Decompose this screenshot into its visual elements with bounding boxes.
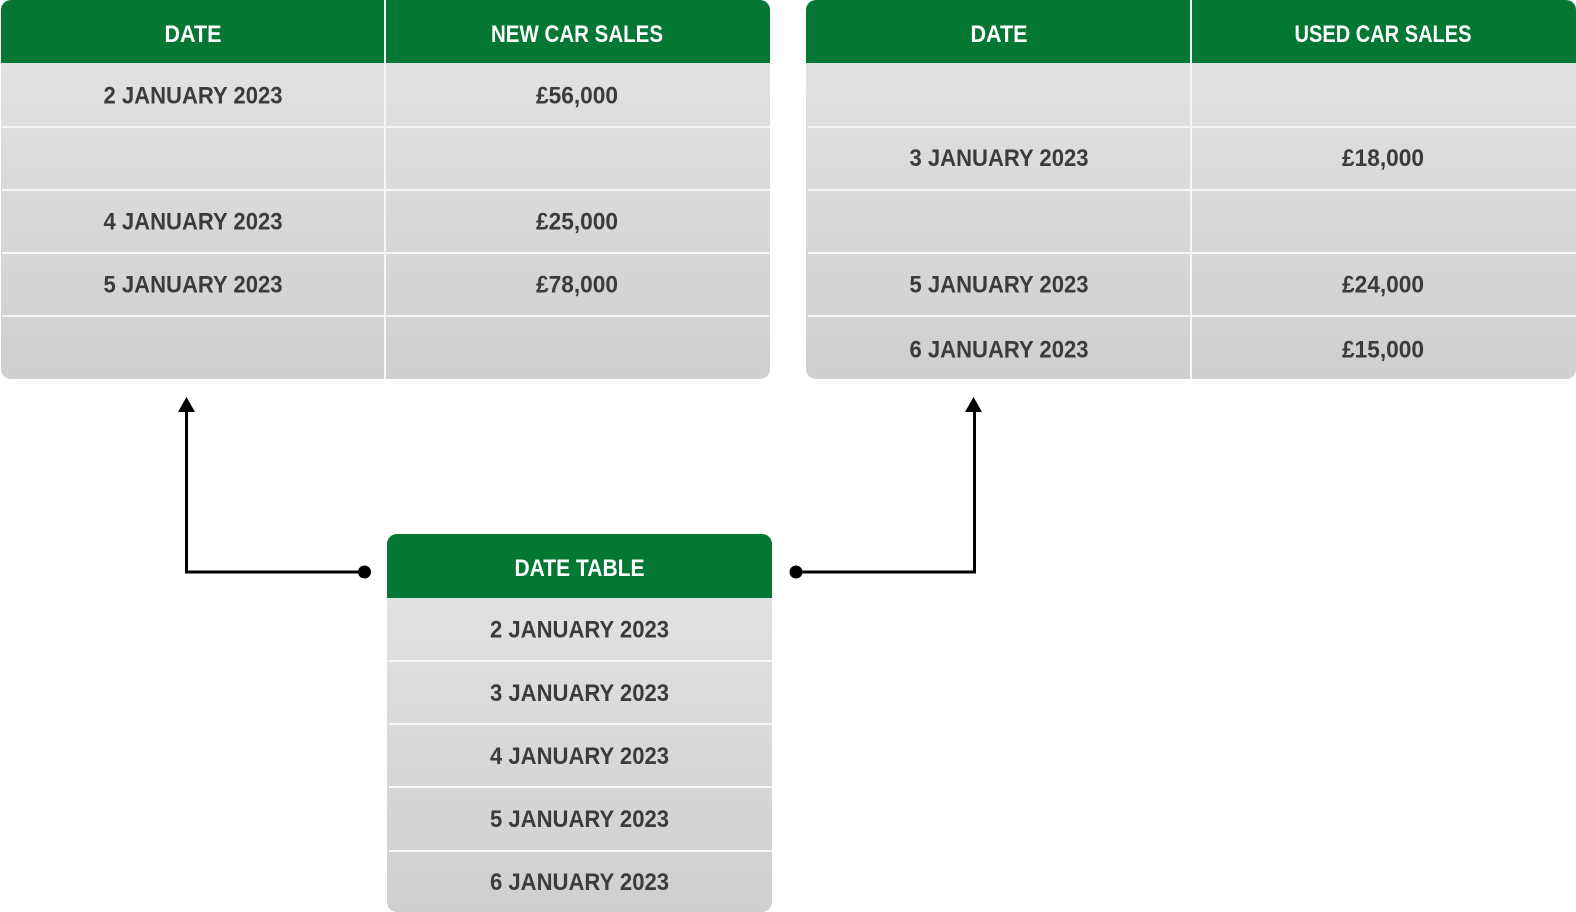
header: date: DATE	[970, 21, 1028, 48]
row: 3 January: 3 JANUARY 2023	[910, 145, 1088, 172]
panel: new car sales table	[1, 0, 770, 379]
row: 5 January: 5 JANUARY 2023	[910, 272, 1088, 298]
value: 18,000: £18,000	[1342, 145, 1424, 172]
row: 6 January: 6 JANUARY 2023	[490, 869, 669, 896]
arrow: date table to used car sales	[790, 397, 982, 578]
row: 3 January: 3 JANUARY 2023	[490, 680, 669, 707]
header: date: DATE	[164, 21, 222, 48]
header: date table: DATE TABLE	[514, 555, 644, 582]
row dividers	[389, 661, 772, 851]
table header	[387, 534, 772, 598]
row: 5 January: 5 JANUARY 2023	[104, 272, 282, 298]
row and column dividers	[808, 0, 1576, 379]
table header	[1, 0, 770, 63]
row: 4 January: 4 JANUARY 2023	[104, 208, 282, 236]
header: used car sales: USED CAR SALES	[1294, 21, 1472, 48]
row and column dividers	[2, 0, 770, 379]
panel: date table	[387, 534, 772, 912]
panel: used car sales table	[806, 0, 1576, 379]
row: 2 January: 2 JANUARY 2023	[104, 82, 282, 110]
row: 2 January: 2 JANUARY 2023	[490, 616, 669, 644]
row: 4 January: 4 JANUARY 2023	[490, 743, 669, 770]
table header	[806, 0, 1576, 63]
value: 25,000: £25,000	[536, 208, 618, 236]
row: 6 January: 6 JANUARY 2023	[910, 336, 1088, 364]
arrow: date table to new car sales	[178, 397, 371, 578]
value: 78,000: £78,000	[536, 272, 618, 298]
table body	[387, 598, 772, 912]
row: 5 January: 5 JANUARY 2023	[490, 806, 669, 833]
header: new car sales: NEW CAR SALES	[491, 21, 663, 48]
value: 15,000: £15,000	[1342, 336, 1424, 364]
table body	[1, 63, 770, 379]
value: 24,000: £24,000	[1342, 272, 1424, 298]
value: 56,000: £56,000	[536, 82, 618, 110]
table body	[806, 63, 1576, 379]
